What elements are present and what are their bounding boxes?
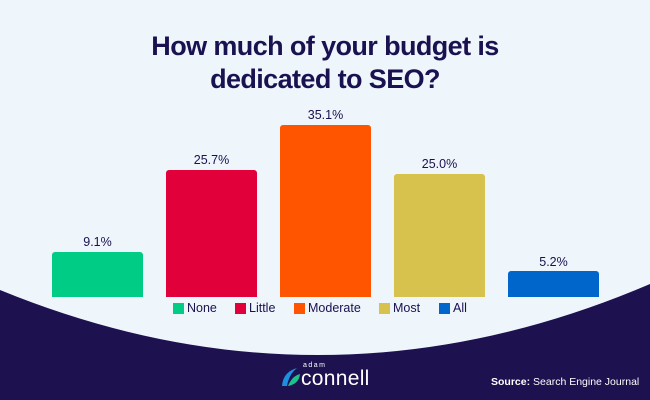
legend: Moderate: Moderate: [308, 301, 361, 315]
logo: adam connell: connell: [301, 367, 370, 390]
legend: All: [439, 301, 467, 315]
label: 35.1%: 35.1%: [308, 108, 343, 122]
label: 5.2%: 5.2%: [539, 255, 568, 269]
label: 25.0%: 25.0%: [422, 157, 457, 171]
label: 9.1%: 9.1%: [83, 235, 112, 249]
source: Source: Search Engine Journal: [491, 376, 639, 388]
legend: [173, 301, 467, 315]
bar chart: [52, 108, 599, 297]
legend: Little: Little: [249, 301, 275, 315]
legend: None: None: [187, 301, 217, 315]
bar: Most: [394, 174, 485, 297]
legend: All: All: [453, 301, 467, 315]
bar: Moderate: [280, 125, 371, 297]
title: dedicated to SEO?: [210, 64, 440, 94]
title: How much of your budget is: [151, 31, 499, 61]
legend: None: [173, 301, 217, 315]
bar: None: [52, 252, 143, 297]
label: 25.7%: 25.7%: [194, 153, 229, 167]
bar: All: [508, 271, 599, 297]
legend: Little: [235, 301, 275, 315]
legend: Most: Most: [393, 301, 420, 315]
title: [151, 31, 499, 94]
bar: Little: [166, 170, 257, 297]
logo text: adam: [303, 362, 327, 369]
logo: adam connell: [282, 362, 370, 390]
icon: logo leaf: [282, 368, 300, 386]
legend: Most: [379, 301, 420, 315]
